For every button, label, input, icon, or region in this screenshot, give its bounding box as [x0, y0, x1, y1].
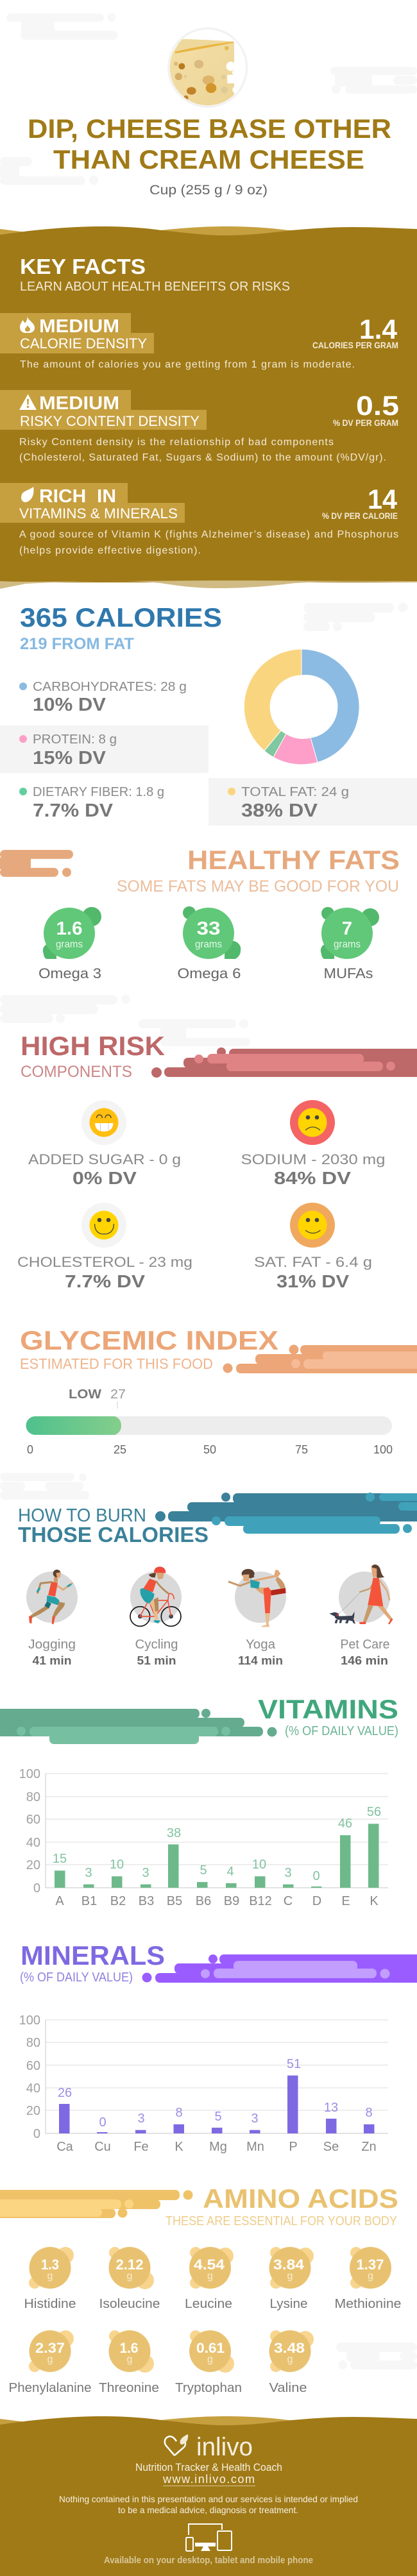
glycemic rating: 27	[110, 1387, 126, 1402]
subheading: (% OF DAILY VALUE)	[285, 1724, 398, 1738]
banner streak	[0, 2190, 192, 2218]
title: DIP, CHEESE BASE OTHER	[28, 114, 391, 144]
item: cholesterol: 7.7% DV	[65, 1271, 145, 1291]
icon: grinning face	[81, 1100, 126, 1145]
bar chart: minerals: 3	[137, 2112, 145, 2126]
legend: dietary fiber: 7.7% DV	[33, 801, 114, 821]
legend: total fat	[208, 778, 417, 826]
amino: leucine: g	[207, 2271, 213, 2282]
subheading: SOME FATS MAY BE GOOD FOR YOU	[117, 877, 399, 895]
stat: omega 6: 33	[196, 919, 221, 939]
fact: risky content density	[0, 390, 399, 463]
fact: risky content density: (Cholesterol, Saturated Fat, Sugars & Sodium) to the amount (%DV/gr).	[19, 452, 386, 463]
icon: smile face	[290, 1203, 335, 1248]
stat: mufas: MUFAs	[323, 965, 373, 981]
activity: cycling: 51 min	[137, 1654, 176, 1667]
amino: histidine: 1.3	[41, 2257, 59, 2273]
wave band background	[0, 226, 417, 589]
bar chart: vitamins: 3	[284, 1866, 292, 1880]
icon: jogger	[26, 1570, 78, 1624]
glycemic gauge bar	[26, 1416, 393, 1456]
bar chart: minerals: 0	[99, 2115, 106, 2130]
stat: mufas: grams	[334, 939, 361, 950]
fact: calorie density: CALORIES PER GRAM	[312, 340, 398, 350]
icon: cheese wedge	[168, 28, 247, 106]
fact: calorie density: CALORIE DENSITY	[20, 335, 147, 352]
bar chart: vitamins: 60	[26, 1813, 40, 1827]
icon: cyclist	[130, 1566, 182, 1626]
amino: threonine: Threonine	[99, 2381, 159, 2395]
stat: omega 6	[177, 906, 241, 981]
glycemic gauge bar: 50	[203, 1443, 216, 1456]
bar chart: minerals: Cu	[94, 2140, 111, 2154]
fact: calorie density	[0, 313, 398, 370]
icon: frowning face	[290, 1100, 335, 1145]
activity: pet care: Pet Care	[340, 1638, 390, 1652]
subheading: (% OF DAILY VALUE)	[20, 1970, 133, 1985]
legend: protein	[0, 725, 208, 773]
banner streak	[151, 1047, 417, 1078]
amino: tryptophan: 0.61	[196, 2340, 225, 2356]
activity: jogging: 41 min	[32, 1654, 72, 1667]
bar chart: minerals: 80	[26, 2036, 40, 2050]
item: cholesterol: CHOLESTEROL - 23 mg	[17, 1254, 192, 1270]
bar chart: minerals: 60	[26, 2059, 40, 2073]
bar chart: vitamins: 15	[53, 1852, 67, 1866]
amino: methionine: Methionine	[335, 2297, 402, 2311]
amino: histidine	[24, 2247, 76, 2311]
bar chart: minerals: 5	[214, 2110, 222, 2124]
bar chart: minerals: Zn	[361, 2140, 377, 2154]
bar chart: minerals: 40	[26, 2081, 40, 2096]
fact: rich in vitamins and minerals	[0, 483, 398, 556]
bar chart: vitamins: 5	[200, 1863, 207, 1877]
bar chart: minerals: Mn	[246, 2140, 264, 2154]
logo: inlivo	[196, 2433, 253, 2461]
bar chart: vitamins: K	[370, 1894, 379, 1908]
panel: footer	[0, 2416, 417, 2576]
amino: lysine: Lysine	[269, 2297, 308, 2311]
amino: lysine	[269, 2247, 314, 2311]
calories from fat: 219 FROM FAT	[20, 635, 134, 653]
stat: omega 6: grams	[195, 939, 222, 950]
fact: risky content density: Risky Content density is the relationship of bad components	[19, 437, 334, 448]
amino: threonine	[99, 2330, 159, 2395]
logo	[165, 2433, 253, 2461]
bar chart: vitamins: 20	[26, 1858, 40, 1872]
disclaimer	[59, 2494, 358, 2515]
panel: calories	[0, 602, 417, 826]
icon: devices	[186, 2524, 232, 2551]
amino: tryptophan: Tryptophan	[175, 2381, 242, 2395]
bar chart: vitamins: B1	[81, 1894, 97, 1908]
bar chart: vitamins: B3	[139, 1894, 154, 1908]
website: www.inlivo.com	[162, 2473, 255, 2486]
disclaimer: Nothing contained in this presentation and our services is intended or implied	[59, 2494, 358, 2504]
disclaimer: to be a medical advice, diagnosis or treatment.	[118, 2505, 298, 2515]
amino: phenylalanine: g	[47, 2354, 53, 2365]
legend: total fat: 38% DV	[241, 801, 318, 821]
amino: phenylalanine: Phenylalanine	[9, 2381, 91, 2395]
panel: healthy fats	[0, 845, 400, 981]
bar chart: vitamins: B5	[167, 1894, 182, 1908]
bar chart: vitamins: 4	[226, 1865, 234, 1879]
subheading: LEARN ABOUT HEALTH BENEFITS OR RISKS	[20, 280, 290, 294]
heading: 365 CALORIES	[20, 602, 222, 632]
amino: lysine: g	[287, 2271, 293, 2282]
subheading: COMPONENTS	[21, 1063, 132, 1081]
item: sodium	[241, 1100, 385, 1188]
bar chart: vitamins: 56	[367, 1805, 381, 1819]
banner streak	[142, 1954, 417, 1983]
stat: omega 3	[38, 907, 101, 981]
bar chart: minerals: 8	[175, 2106, 183, 2120]
item: added sugar: ADDED SUGAR - 0 g	[28, 1151, 181, 1167]
activity: yoga: 114 min	[238, 1654, 283, 1667]
activity: cycling: Cycling	[135, 1638, 178, 1652]
subheading: ESTIMATED FOR THIS FOOD	[20, 1355, 213, 1372]
bar chart: vitamins: D	[312, 1894, 321, 1908]
fact: rich in vitamins and minerals: RICH IN	[39, 486, 116, 507]
donut chart	[244, 649, 359, 765]
item: added sugar: 0% DV	[72, 1168, 137, 1188]
amino: leucine	[185, 2247, 234, 2311]
amino: valine: g	[287, 2354, 293, 2365]
amino: isoleucine	[99, 2247, 160, 2311]
fact: calorie density: MEDIUM	[39, 316, 119, 337]
icon: warning triangle	[19, 394, 37, 410]
fact: risky content density: RISKY CONTENT DENSITY	[20, 413, 200, 429]
amino: tryptophan	[175, 2330, 242, 2395]
stat: omega 3: 1.6	[56, 919, 82, 939]
bar chart: vitamins: C	[284, 1894, 293, 1908]
bar chart: minerals: 0	[33, 2127, 40, 2141]
icon: flame	[20, 316, 35, 333]
amino: threonine: g	[127, 2354, 132, 2365]
serving size: Cup (255 g / 9 oz)	[149, 183, 268, 198]
item: sodium: SODIUM - 2030 mg	[241, 1151, 385, 1167]
item: saturated fat	[254, 1203, 372, 1291]
amino: leucine: Leucine	[185, 2297, 232, 2311]
wave band background	[0, 2416, 417, 2576]
fact: calorie density: 1.4	[359, 314, 397, 345]
glycemic gauge bar: 0	[27, 1443, 33, 1456]
glycemic rating	[69, 1387, 126, 1409]
legend: protein: 15% DV	[33, 748, 106, 768]
fact: rich in vitamins and minerals: A good source of Vitamin K (fights Alzheimer’s disease) and Phosphorus	[19, 529, 398, 540]
fact: risky content density: MEDIUM	[39, 393, 119, 414]
banner streak	[0, 1709, 277, 1744]
bar chart: vitamins: 10	[252, 1858, 266, 1872]
bar chart: vitamins	[19, 1767, 388, 1908]
legend: carbohydrates	[19, 680, 187, 715]
title	[28, 114, 391, 174]
fact: rich in vitamins and minerals: % DV PER CALORIE	[322, 511, 398, 521]
bar chart: vitamins: E	[341, 1894, 350, 1908]
amino: leucine: 4.54	[194, 2257, 225, 2273]
panel: amino acids	[0, 2183, 402, 2395]
amino: valine: Valine	[269, 2381, 307, 2395]
heading line 2: THOSE CALORIES	[18, 1523, 208, 1546]
heading line 1: HOW TO BURN	[18, 1505, 146, 1526]
glycemic rating: LOW	[69, 1387, 101, 1402]
bar chart: vitamins: 10	[110, 1858, 124, 1872]
amino: histidine: g	[47, 2271, 53, 2282]
bar chart: minerals: 100	[19, 2013, 40, 2028]
activity: cycling	[130, 1566, 182, 1667]
fact: calorie density: The amount of calories you are getting from 1 gram is moderate.	[20, 359, 355, 370]
subheading: THESE ARE ESSENTIAL FOR YOUR BODY	[166, 2214, 397, 2228]
amino: methionine	[335, 2247, 402, 2311]
banner streak	[0, 850, 73, 877]
bar chart: vitamins: 3	[142, 1866, 149, 1880]
fact: rich in vitamins and minerals: (helps provide effective digestion).	[19, 545, 201, 556]
bar chart: vitamins: 0	[312, 1869, 320, 1883]
item: sodium: 84% DV	[274, 1168, 351, 1188]
stat: omega 6: Omega 6	[177, 965, 241, 981]
amino: valine: 3.48	[274, 2340, 305, 2356]
activity: yoga: Yoga	[246, 1638, 276, 1652]
bar chart: minerals: Ca	[56, 2140, 74, 2154]
bar chart: minerals: 3	[251, 2112, 259, 2126]
legend: dietary fiber: DIETARY FIBER: 1.8 g	[33, 785, 164, 799]
bar chart: minerals: Fe	[133, 2140, 149, 2154]
amino: methionine: g	[368, 2271, 373, 2282]
amino: phenylalanine	[9, 2330, 91, 2395]
fact: risky content density: 0.5	[356, 391, 399, 421]
bar chart: minerals: P	[289, 2140, 298, 2154]
amino: phenylalanine: 2.37	[35, 2340, 65, 2356]
bar chart: vitamins: 3	[85, 1866, 92, 1880]
glycemic gauge bar: 25	[114, 1443, 126, 1456]
item: saturated fat: 31% DV	[277, 1271, 349, 1291]
amino: lysine: 3.84	[273, 2257, 305, 2273]
bar chart: minerals: 51	[287, 2057, 301, 2071]
bar chart: minerals: 20	[26, 2104, 40, 2118]
bar chart: vitamins: B6	[196, 1894, 211, 1908]
activity: jogging: Jogging	[28, 1638, 76, 1652]
stat: omega 3: Omega 3	[38, 965, 101, 981]
icon: heart and leaf	[165, 2434, 188, 2455]
bar chart: minerals: K	[174, 2140, 183, 2154]
bar chart: vitamins: 38	[167, 1826, 181, 1840]
bar chart: minerals: 8	[365, 2106, 373, 2120]
amino: valine	[269, 2330, 314, 2395]
fact: rich in vitamins and minerals: VITAMINS & MINERALS	[19, 505, 178, 521]
glycemic gauge bar: 100	[373, 1443, 393, 1456]
bar chart: minerals: 26	[58, 2086, 72, 2100]
panel: key facts	[0, 226, 417, 589]
item: added sugar	[28, 1100, 181, 1188]
legend: dietary fiber	[19, 785, 164, 821]
amino: isoleucine: 2.12	[115, 2257, 144, 2273]
heading: GLYCEMIC INDEX	[20, 1325, 278, 1355]
icon: leaf	[21, 487, 33, 502]
heading: HIGH RISK	[21, 1031, 165, 1061]
header: food image and title	[28, 28, 391, 198]
bar chart: vitamins: B2	[110, 1894, 126, 1908]
bar chart: vitamins: A	[55, 1894, 64, 1908]
legend: carbohydrates: CARBOHYDRATES: 28 g	[33, 680, 187, 694]
bar chart: minerals: Mg	[209, 2140, 227, 2154]
amino: histidine: Histidine	[24, 2297, 76, 2311]
bar chart: minerals: 13	[324, 2101, 338, 2115]
icon: person walking dog	[329, 1564, 393, 1624]
banner streak	[223, 1344, 417, 1373]
icon: yoga pose	[228, 1569, 286, 1627]
heading: VITAMINS	[258, 1694, 398, 1724]
amino: threonine: 1.6	[119, 2340, 139, 2356]
icon: big smile face	[81, 1203, 126, 1248]
legend: protein: PROTEIN: 8 g	[33, 733, 117, 747]
fact: risky content density: % DV PER GRAM	[333, 418, 398, 428]
activity: pet care: 146 min	[341, 1654, 388, 1667]
bar chart: vitamins: 100	[19, 1767, 40, 1781]
stat: mufas: 7	[342, 919, 352, 939]
bar chart: vitamins: 46	[338, 1817, 352, 1831]
panel: vitamins	[0, 1694, 398, 1908]
legend: carbohydrates: 10% DV	[33, 695, 106, 715]
panel: minerals	[19, 1940, 417, 2154]
amino: tryptophan: g	[207, 2354, 213, 2365]
amino: methionine: 1.37	[357, 2257, 384, 2273]
heading: HEALTHY FATS	[187, 845, 400, 875]
activity: jogging	[26, 1570, 78, 1667]
stat: omega 3: grams	[56, 939, 83, 950]
activity: yoga	[228, 1569, 286, 1667]
stat: mufas	[321, 907, 379, 981]
heading: KEY FACTS	[20, 255, 146, 278]
tagline: Nutrition Tracker & Health Coach	[135, 2461, 282, 2473]
bar chart: vitamins: B12	[249, 1894, 272, 1908]
heading: AMINO ACIDS	[203, 2183, 398, 2214]
bar chart: vitamins: 40	[26, 1836, 40, 1850]
bar chart: vitamins: 80	[26, 1790, 40, 1804]
item: saturated fat: SAT. FAT - 6.4 g	[254, 1254, 372, 1270]
item: cholesterol	[17, 1203, 192, 1291]
glycemic gauge bar: 75	[295, 1443, 308, 1456]
activity: pet care	[329, 1564, 393, 1667]
bar chart: minerals	[19, 2013, 388, 2154]
bar chart: vitamins: B9	[224, 1894, 239, 1908]
fact: rich in vitamins and minerals: 14	[368, 484, 397, 515]
panel: high risk components	[17, 1031, 417, 1291]
banner streak	[155, 1493, 417, 1534]
amino: isoleucine: g	[127, 2271, 132, 2282]
title: THAN CREAM CHEESE	[53, 144, 364, 174]
heading: MINERALS	[21, 1940, 165, 1970]
bar chart: vitamins: 0	[33, 1881, 40, 1895]
legend: total fat: TOTAL FAT: 24 g	[241, 785, 349, 799]
panel: how to burn calories	[18, 1493, 417, 1667]
bar chart: minerals: Se	[323, 2140, 339, 2154]
availability note: Available on your desktop, tablet and mobile phone	[104, 2555, 313, 2566]
panel: glycemic index	[20, 1325, 417, 1456]
amino: isoleucine: Isoleucine	[99, 2297, 160, 2311]
